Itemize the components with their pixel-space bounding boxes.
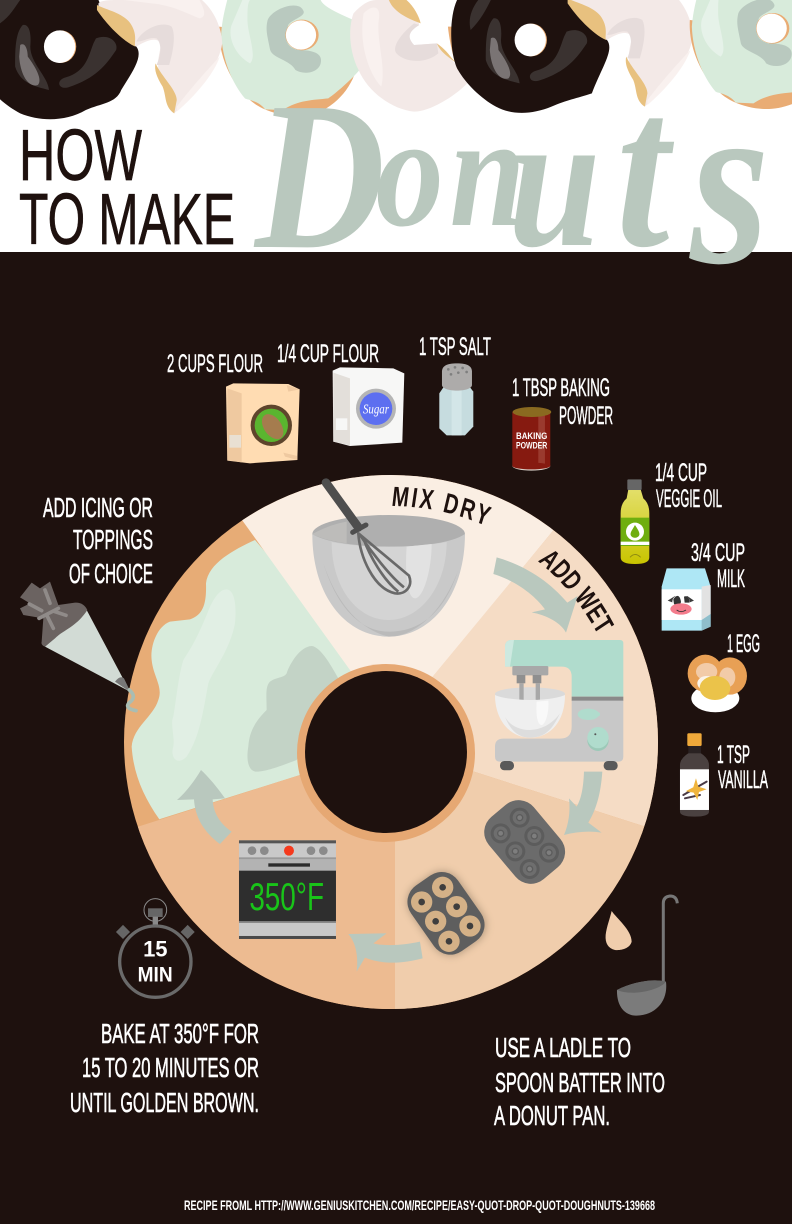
title: donuts script: D [253,58,385,293]
icon: flour bag [226,383,300,463]
ingredient labels: 1 TSP [717,741,750,769]
donut: chocolate left [0,0,139,119]
center hole [305,671,467,833]
label: add wet: ADD WET [538,551,614,632]
title: how to make [19,116,235,260]
icon: ladle [617,896,677,1016]
text: add icing [43,492,153,589]
icon: filled donut pan [399,863,494,963]
title: how to make: TO MAKE [19,180,235,260]
text: ladle instructions: A DONUT PAN. [494,1100,610,1131]
text: ladle instructions: USE A LADLE TO [495,1032,631,1063]
ingredient labels: 3/4 CUP [691,539,745,567]
icon: baking powder can [512,407,551,471]
icon: piping bag [20,582,136,711]
ingredient labels: MILK [717,565,745,593]
donut: pink middle [350,0,467,112]
ingredient labels: POWDER [559,402,613,430]
title: donuts script: n [450,84,525,261]
icon: baking powder can: BAKING [516,431,547,441]
icon: vanilla bottle [680,733,709,817]
dark background panel [0,252,792,1224]
text: ladle instructions: SPOON BATTER INTO [495,1067,665,1098]
icing swirl on wheel [132,540,367,819]
wheel segment: icing base [120,470,665,1015]
wheel segment: bake [138,775,395,1009]
center ring [297,664,475,842]
icon: batter drop [606,911,632,950]
text: bake instructions: 15 TO 20 MINUTES OR [82,1052,259,1083]
donut: mint left [219,0,360,116]
ingredient labels: 2 CUPS FLOUR [167,350,263,378]
text: bake instructions [70,1018,259,1118]
icon: milk carton [662,568,711,631]
icon: sugar bag: Sugar [363,402,389,417]
ingredient labels: 1 TSP SALT [419,333,491,361]
label: mix dry: MIX DRY [392,486,492,524]
icon: oil bottle [621,479,649,564]
text: ladle instructions [494,1032,665,1131]
arrow: add wet to batter [564,772,602,835]
ingredient labels: 1 TBSP BAKING [512,374,610,402]
text: add icing: TOPPINGS [73,524,153,555]
process wheel [124,475,658,1009]
wheel segment: spoon batter [395,772,644,1009]
icon: stand mixer [495,640,623,770]
text: add icing: OF CHOICE [69,558,153,589]
text: bake instructions: UNTIL GOLDEN BROWN. [70,1087,259,1118]
arrow: mix to add wet [493,557,578,633]
icon: empty donut pan [476,792,573,892]
donut: pink left [97,0,222,113]
title: donuts script: u [508,73,600,288]
text: add icing: ADD ICING OR [43,492,153,523]
icon: timer 15 min [116,899,195,997]
arrow: pan to oven [348,933,423,972]
ingredient labels: 1/4 CUP FLOUR [277,340,379,368]
wheel segment: add wet [432,530,658,826]
icon: sugar bag [333,367,404,446]
wheel segment: mix dry [242,475,554,677]
title: donuts script: s [688,50,770,315]
donut row repeated: chocolate, pink, mint [448,0,792,113]
icon: mixing bowl with whisk [312,483,465,637]
icon: oven [239,840,336,939]
title: donuts script: t [616,46,675,295]
donut row decoration [0,0,792,119]
ingredient labels: 1/4 CUP [655,459,707,487]
icon: timer 15 min: MIN [138,962,173,986]
arrow: oven to icing [177,770,232,844]
ingredient labels [167,333,768,794]
icon: oven: 350°F [249,875,324,919]
icon: salt shaker [439,363,473,435]
header background [0,0,792,252]
icon: baking powder can: POWDER [516,441,548,451]
text: bake instructions: BAKE AT 350°F FOR [101,1018,259,1049]
icon: egg [688,655,747,712]
title: donuts script: o [376,84,444,261]
icon: timer 15 min: 15 [143,937,168,962]
title: how to make: HOW [19,116,142,196]
